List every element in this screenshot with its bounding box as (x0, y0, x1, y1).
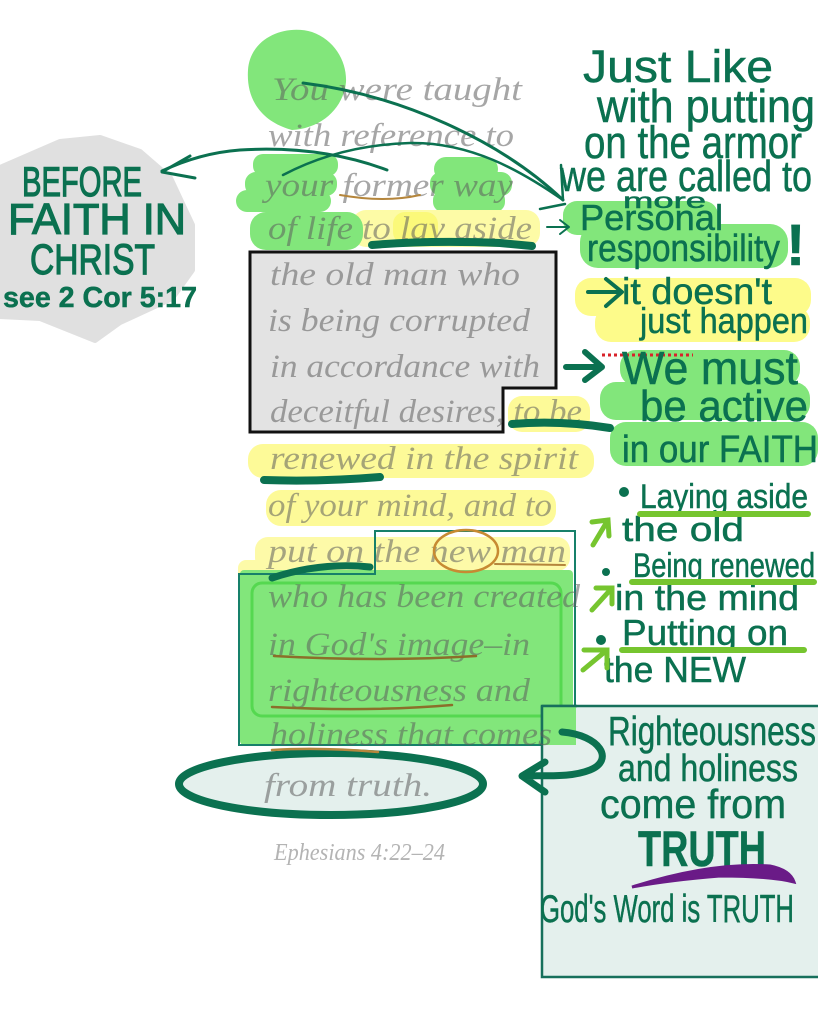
scripture text: You were taught (272, 72, 523, 108)
notes: right column: more (623, 190, 706, 213)
bullets and underlines (583, 487, 814, 670)
scripture text: righteousness and (268, 673, 531, 709)
notes: truth panel text: come from (600, 781, 786, 827)
arrow: to truth (522, 732, 602, 792)
notes: right column: it doesn't (622, 271, 773, 312)
scripture text: holiness that comes (270, 717, 552, 753)
notes: right column: be active (640, 382, 808, 431)
notes: truth panel text (540, 708, 816, 931)
scripture text: of your mind, and to (268, 488, 552, 524)
notes: truth panel text: TRUTH (638, 821, 766, 877)
arrow: crossing stroke (283, 143, 565, 209)
notes: right column: Putting on (622, 612, 788, 653)
scripture text: in accordance with (270, 349, 540, 385)
notes: right column: Just Like (583, 41, 773, 92)
scripture text: deceitful desires, to be (270, 394, 582, 430)
notes: right column: Personal (580, 197, 723, 238)
panel: new man green box (239, 531, 575, 745)
citation: Ephesians 4:22-24: Ephesians 4:22–24 (273, 840, 445, 866)
notes: right column: the old (622, 511, 744, 549)
notes: right column: the NEW (604, 649, 746, 690)
scripture text: the old man who (270, 257, 520, 293)
panel: before faith gray blob (0, 138, 197, 340)
panel: old man gray box (250, 252, 556, 432)
heading: before faith in Christ: see 2 Cor 5:17 (3, 282, 197, 314)
scripture text: from truth. (264, 768, 432, 804)
scripture text (262, 72, 582, 804)
scripture text: is being corrupted (268, 303, 531, 339)
arrow: it doesn't (588, 279, 622, 306)
scripture text: your former way (262, 168, 513, 204)
notes: right column: in the mind (615, 577, 799, 618)
arrow: taught to personal responsibility (303, 83, 563, 200)
scripture text: put on the new man (266, 534, 566, 570)
arrow: to personal (547, 220, 569, 234)
heading: before faith in Christ: CHRIST (30, 236, 155, 284)
notes: right column (559, 41, 818, 690)
scripture text: in God's image–in (268, 627, 530, 663)
heading: before faith in Christ: BEFORE (22, 158, 142, 205)
highlights: green and yellow (236, 30, 818, 580)
panel: truth box (542, 706, 818, 977)
arrows (162, 83, 622, 792)
notes: right column: responsibility (587, 228, 780, 270)
callout: from truth ellipse (179, 753, 483, 815)
heading: before faith in Christ (3, 158, 197, 314)
dotted red line (602, 354, 693, 356)
notes: right column: ! (786, 213, 805, 278)
notes: right column: We must (622, 342, 798, 394)
scripture text: renewed in the spirit (270, 441, 579, 477)
arrow: to before faith (162, 149, 387, 178)
scripture text: of life to lay aside (268, 211, 532, 247)
underlines and circle on scripture (264, 195, 610, 752)
heading: before faith in Christ: FAITH IN (8, 195, 186, 244)
scripture text: who has been created (268, 579, 581, 615)
arrow: old man to active (566, 352, 602, 380)
scripture text: with reference to (268, 118, 514, 154)
